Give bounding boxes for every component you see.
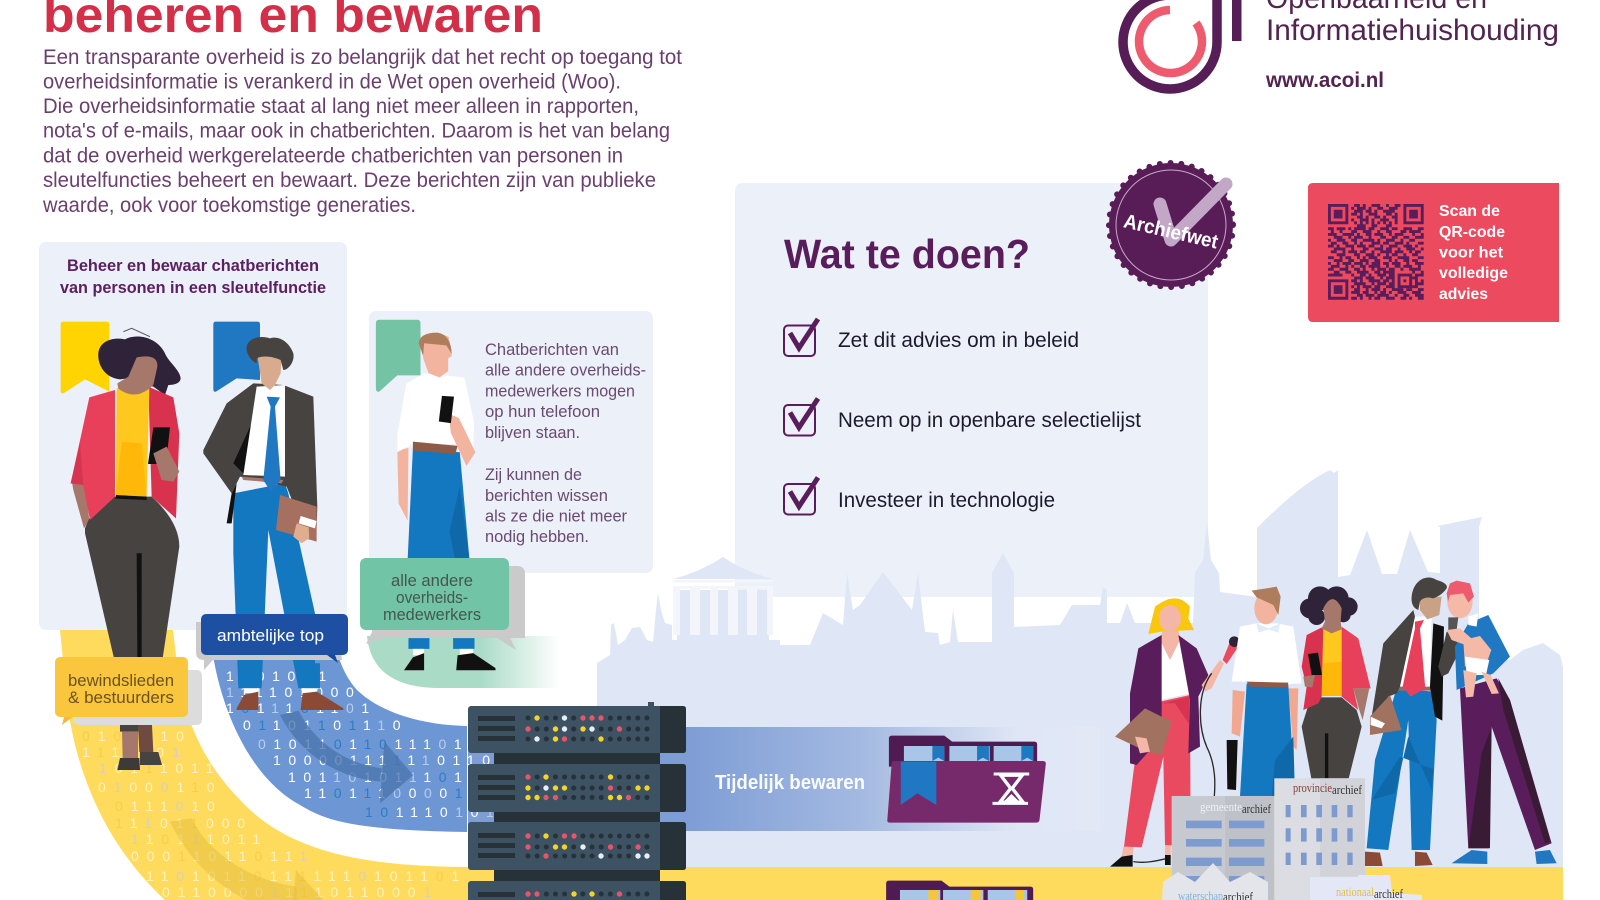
yellow binary digits: 1111101 <box>82 744 188 760</box>
panel: wat te doen <box>735 183 1208 597</box>
yellow binary digits: 000110110111 <box>131 848 315 864</box>
yellow binary digits: 0111010 <box>115 798 223 814</box>
blue binary digits: 1011101101 <box>226 700 377 716</box>
person: bestuurder <box>1300 586 1371 780</box>
panel: alle andere medewerkers <box>369 311 653 573</box>
panel text: andere medewerkers <box>485 340 646 546</box>
person: topambtenaar <box>1365 577 1460 866</box>
yellow binary digits: 110111011 <box>131 831 268 847</box>
panel text: andere medewerkers: blijven staan. <box>485 423 580 442</box>
yellow binary digits: 0101010 <box>82 728 192 744</box>
intro text: Die overheidsinformatie staat al lang niet meer alleen in rapporten, <box>43 95 639 118</box>
icon: QR code <box>1328 204 1424 300</box>
building: provinciearchief: archief <box>1332 783 1363 797</box>
intro text: sleutelfuncties beheert en bewaart. Deze berichten zijn van publieke <box>43 169 656 192</box>
intro text: waarde, ook voor toekomstige generaties. <box>42 194 416 217</box>
bubble: alle andere overheidsmedewerkers: overheids- <box>396 589 468 607</box>
checklist item 1 <box>784 319 1079 356</box>
icon: folder tijdelijk bewaren <box>887 736 1046 823</box>
organisation name: www.acoi.nl <box>1265 69 1384 92</box>
building: gemeentearchief: archief <box>1242 802 1272 816</box>
bubble: bewindslieden en bestuurders: & bestuurders <box>68 688 174 707</box>
temple columns <box>673 580 773 635</box>
blue binary digits: 1011010111011 <box>288 769 484 785</box>
panel text: andere medewerkers: op hun telefoon <box>485 402 600 421</box>
panel text: andere medewerkers: Zij kunnen de <box>485 465 582 484</box>
yellow binary digits: 111011000 <box>115 815 253 831</box>
building: gemeentearchief: gemeente <box>1200 800 1242 814</box>
panel: sleutelfunctie <box>39 242 347 630</box>
person: medewerker met koffer <box>1227 587 1302 797</box>
panel text: andere medewerkers: alle andere overheids- <box>485 360 646 380</box>
panel text: andere medewerkers: als ze die niet meer <box>485 506 627 526</box>
organisation name <box>1265 0 1559 92</box>
badge: archiefwet <box>1109 163 1233 287</box>
checklist item 2: Neem op in openbare selectielijst <box>838 409 1141 432</box>
blue binary digits: 1001001 <box>226 668 334 684</box>
icon: folder permanent bewaren <box>886 881 1033 900</box>
building: provinciearchief <box>1274 778 1365 900</box>
QR call to action: QR-code <box>1439 224 1505 241</box>
blue binary digits: 01101101110 <box>243 717 408 733</box>
QR call to action: advies <box>1439 286 1488 303</box>
panel heading: Beheer en bewaar chatberichten <box>67 257 319 275</box>
yellow binary digits: 01000110 <box>98 779 222 795</box>
figure: ambtelijke top <box>203 322 343 710</box>
stream: blue data band <box>213 655 467 832</box>
bubble: ambtelijke top <box>196 614 348 670</box>
yellow binary digits: 110101101111110101101 <box>146 868 467 884</box>
QR call to action <box>1439 203 1508 303</box>
yellow binary digits <box>82 728 467 900</box>
figure: overheidsmedewerker <box>376 320 496 670</box>
blue binary digits <box>226 668 513 820</box>
panel: QR-code <box>1308 183 1559 322</box>
yellow binary digits: 10111011 <box>99 760 221 776</box>
checklist item 3 <box>784 478 1055 514</box>
bubble: alle andere overheidsmedewerkers: medewerkers <box>383 606 481 624</box>
QR call to action: voor het <box>1439 244 1504 262</box>
yellow binary digits: 011000011110110001 <box>162 884 439 900</box>
city skyline <box>597 470 1563 900</box>
intro text: nota's of e-mails, maar ook in chatberichten. Daarom is het van belang <box>43 120 670 142</box>
badge: archiefwet: Archiefwet <box>1122 210 1220 254</box>
stream: yellow data band <box>60 630 1563 900</box>
bubble: alle andere overheidsmedewerkers: alle andere <box>391 572 473 590</box>
QR call to action: Scan de <box>1439 203 1500 220</box>
logo ACOI <box>1123 0 1242 89</box>
arrow: blue stream <box>280 711 413 803</box>
figure: bewindspersoon <box>61 322 181 770</box>
panel heading: van personen in een sleutelfunctie <box>60 279 326 297</box>
label: tijdelijk bewaren: Tijdelijk bewaren <box>715 772 865 794</box>
blue binary digits: 111101000 <box>226 684 361 700</box>
bubble: bewindslieden en bestuurders <box>55 657 202 725</box>
band: tijdelijk bewaren <box>468 727 1100 831</box>
check title: Wat te doen? <box>784 231 1030 277</box>
blue binary digits: 1000011111101100 <box>273 752 513 768</box>
panel text: andere medewerkers: nodig hebben. <box>485 527 589 546</box>
arrow: yellow stream <box>170 818 323 900</box>
checklist item 1: Zet dit advies om in beleid <box>838 329 1079 352</box>
blue binary digits: 101110101 <box>365 804 501 820</box>
blue binary digits: 01011011011101 <box>258 736 469 752</box>
panel text: andere medewerkers: medewerkers mogen <box>485 382 635 400</box>
building: nationaal archief <box>1310 875 1422 900</box>
bubble: alle andere overheidsmedewerkers <box>360 558 525 650</box>
panel text: andere medewerkers: berichten wissen <box>485 486 608 505</box>
intro text: overheidsinformatie is verankerd in de Wet open overheid (Woo). <box>43 70 621 94</box>
building: nationaal archief: nationaal <box>1336 885 1374 899</box>
building: provinciearchief: provincie <box>1293 781 1332 795</box>
organisation name: Informatiehuishouding <box>1266 14 1559 47</box>
person: ouder met baby <box>1447 581 1557 864</box>
panel text: andere medewerkers: Chatberichten van <box>485 340 619 359</box>
intro text <box>42 46 682 217</box>
bubble: ambtelijke top: ambtelijke top <box>217 626 324 645</box>
building: gemeentearchief <box>1172 796 1274 900</box>
green fade area <box>367 636 560 688</box>
intro text: dat de overheid werkgerelateerde chatberichten van personen in <box>43 144 623 168</box>
bubble: bewindslieden en bestuurders: bewindslieden <box>68 671 174 690</box>
checklist item 2 <box>784 398 1141 436</box>
person: journalist <box>1110 598 1240 867</box>
panel heading <box>60 257 326 297</box>
people group <box>1110 577 1557 867</box>
intro text: Een transparante overheid is zo belangrijk dat het recht op toegang tot <box>43 46 682 69</box>
building: waterschapsarchief <box>1162 863 1268 900</box>
temple pediment <box>673 557 773 579</box>
server rack <box>468 702 686 900</box>
checklist item 3: Investeer in technologie <box>838 489 1055 512</box>
blue binary digits: 110111000011 <box>304 785 485 801</box>
QR call to action: volledige <box>1439 265 1508 282</box>
